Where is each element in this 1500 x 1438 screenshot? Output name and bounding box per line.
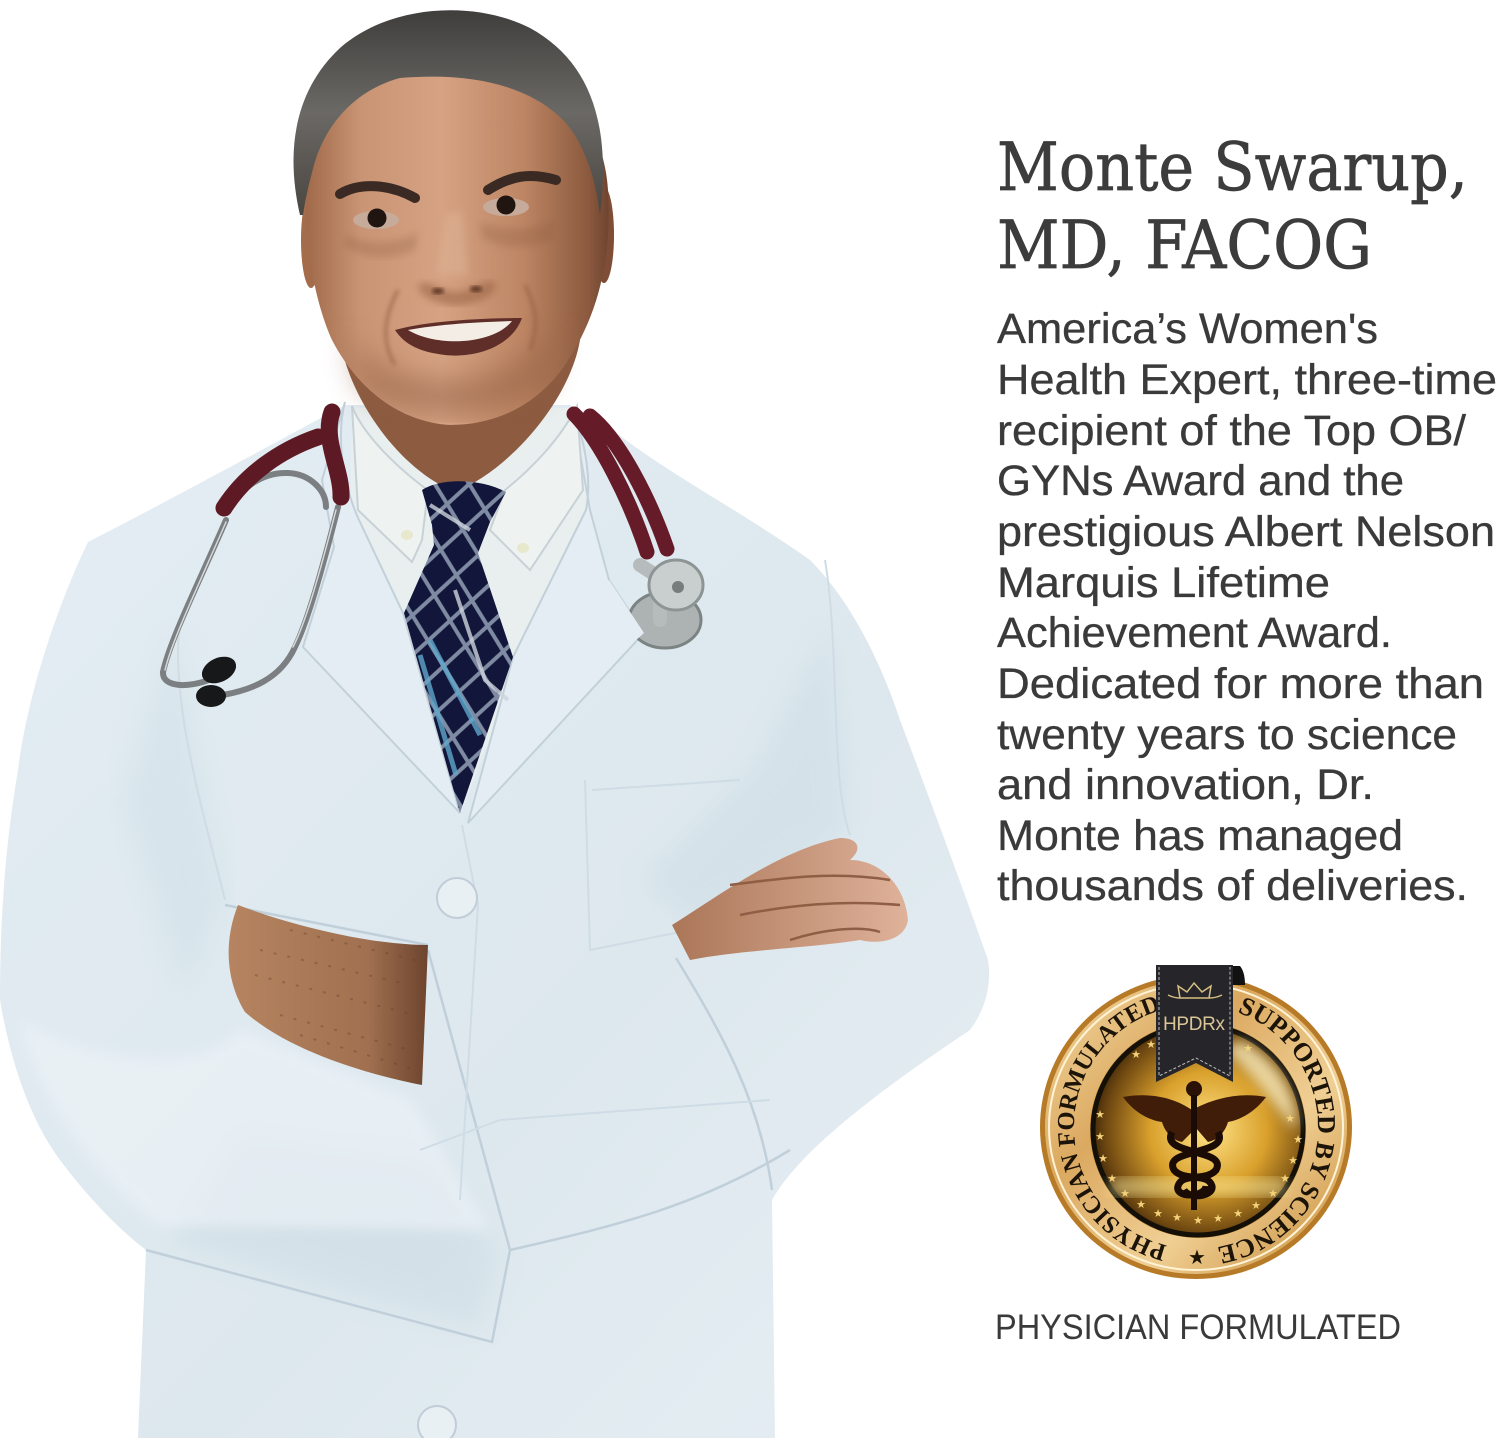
- necktie: [404, 481, 513, 813]
- biography text block: and innovation, Dr.: [997, 761, 1374, 809]
- badge gold stars: ★: [1136, 1198, 1146, 1211]
- biography text block: recipient of the Top OB/: [997, 407, 1466, 455]
- biography text block: Achievement Award.: [997, 609, 1392, 657]
- badge gold stars: [1095, 1038, 1303, 1227]
- biography text block: GYNs Award and the: [997, 457, 1404, 505]
- badge gold stars: ★: [1251, 1199, 1261, 1212]
- photo: doctor in white coat with arms crossed: [0, 10, 989, 1438]
- shirt: [350, 408, 590, 815]
- badge inner disc: [1090, 1022, 1306, 1238]
- badge circular lettering: PHYSICIAN FORMULATED: [1058, 997, 1167, 1261]
- badge gold stars: ★: [1243, 1042, 1253, 1055]
- name heading: [997, 129, 1468, 284]
- badge black ribbon: [1156, 965, 1245, 1082]
- badge gold stars: ★: [1120, 1187, 1130, 1200]
- eyebrows: [340, 176, 556, 198]
- head and face: [301, 60, 614, 425]
- name heading: MD, FACOG: [997, 207, 1372, 284]
- badge gold ring: [1040, 975, 1352, 1279]
- badge gold stars: ★: [1131, 1048, 1141, 1061]
- badge gold stars: ★: [1193, 1214, 1203, 1227]
- badge gold stars: ★: [1153, 1207, 1163, 1220]
- nose: [418, 210, 496, 305]
- badge circular lettering: [1058, 997, 1335, 1264]
- biography text block: twenty years to science: [997, 711, 1457, 759]
- shirt collar: [352, 406, 583, 570]
- badge gold stars: ★: [1172, 1211, 1182, 1224]
- biography text block: thousands of deliveries.: [997, 862, 1468, 910]
- stethoscope: [163, 412, 703, 707]
- badge caduceus: [1123, 1081, 1266, 1210]
- badge gold stars: ★: [1095, 1108, 1105, 1121]
- badge gold stars: ★: [1107, 1172, 1117, 1185]
- badge gold stars: ★: [1280, 1172, 1290, 1185]
- forearm: [229, 905, 428, 1085]
- badge caption: PHYSICIAN FORMULATED: [995, 1308, 1401, 1347]
- hand: [672, 838, 908, 960]
- coat button: [437, 878, 477, 918]
- badge gold stars: ★: [1095, 1130, 1105, 1143]
- biography text block: Monte has managed: [997, 812, 1403, 860]
- badge: physician formulated seal: [1040, 965, 1352, 1279]
- badge gold stars: ★: [1285, 1112, 1295, 1125]
- smile: [395, 318, 522, 356]
- badge star: ★: [1188, 1245, 1206, 1269]
- badge gold stars: ★: [1293, 1133, 1303, 1146]
- biography text block: America’s Women's: [997, 305, 1378, 353]
- badge gold stars: ★: [1268, 1187, 1278, 1200]
- badge gold stars: ★: [1233, 1207, 1243, 1220]
- badge gold stars: ★: [1098, 1152, 1108, 1165]
- badge gold stars: ★: [1146, 1038, 1156, 1051]
- lapel tip over chest piece: [590, 580, 644, 672]
- white lab coat: [0, 405, 989, 1438]
- eyes: [353, 196, 529, 229]
- badge circular lettering: SUPPORTED BY SCIENCE: [1218, 998, 1335, 1264]
- badge gold stars: ★: [1213, 1212, 1223, 1225]
- biography text block: Marquis Lifetime: [997, 559, 1330, 607]
- hair: [293, 10, 603, 215]
- badge gold stars: ★: [1288, 1154, 1298, 1167]
- neck: [340, 340, 580, 492]
- biography text block: Health Expert, three-time: [997, 356, 1497, 404]
- biography text block: prestigious Albert Nelson: [997, 508, 1495, 556]
- coat lapels: [303, 402, 644, 823]
- biography text block: [997, 305, 1497, 910]
- badge black ribbon: HPDRx: [1163, 1014, 1226, 1035]
- name heading: Monte Swarup,: [997, 129, 1468, 206]
- lower coat button: [418, 1406, 456, 1438]
- biography text block: Dedicated for more than: [997, 660, 1484, 708]
